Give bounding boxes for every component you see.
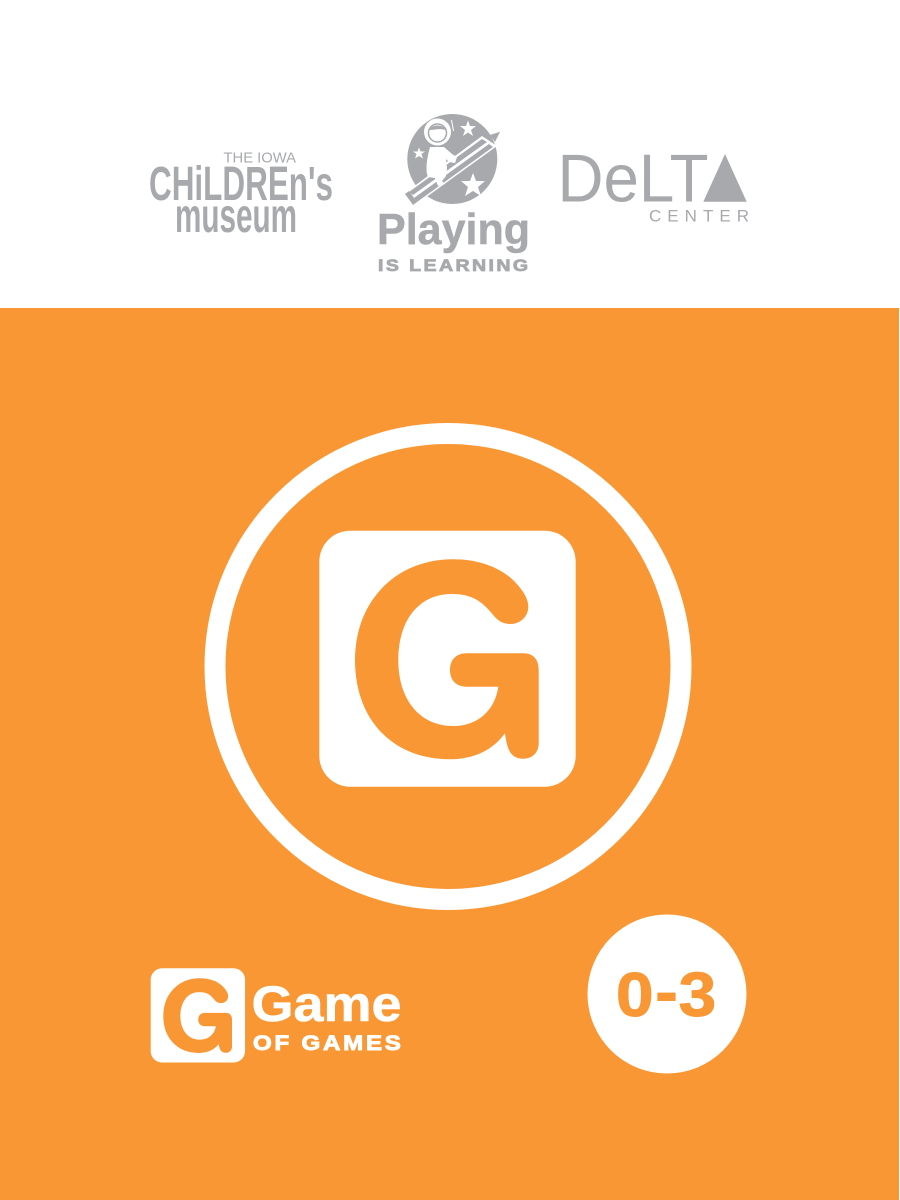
logo text: DeLT: DeLT	[558, 140, 708, 216]
logo triangle	[703, 154, 747, 202]
logo: Playing is Learning	[377, 114, 530, 275]
logo text: Of Games: OF GAMES	[253, 1030, 401, 1055]
logo text: Museum: museum	[175, 190, 297, 243]
logo text: Game: Game	[252, 976, 402, 1032]
logo text: Is Learning: IS LEARNING	[378, 255, 528, 275]
logo text: Playing: Playing	[377, 205, 530, 254]
logo text: The Iowa: THE IOWA	[224, 150, 296, 166]
main emblem ring	[215, 434, 681, 900]
logo: The Iowa Children's Museum	[149, 150, 333, 243]
icon: astronaut riding a pencil	[405, 114, 500, 206]
age label: 0-3	[616, 957, 716, 1029]
logo text: Center: CENTER	[649, 207, 749, 226]
logo tile	[151, 968, 245, 1063]
logo: DeLTA Center	[558, 140, 749, 226]
main G tile	[319, 531, 576, 787]
logo text: Children's: CHiLDREn's	[149, 158, 333, 211]
panel: orange background	[0, 308, 899, 1200]
age badge	[588, 914, 746, 1074]
Game of Games logo	[151, 968, 402, 1063]
